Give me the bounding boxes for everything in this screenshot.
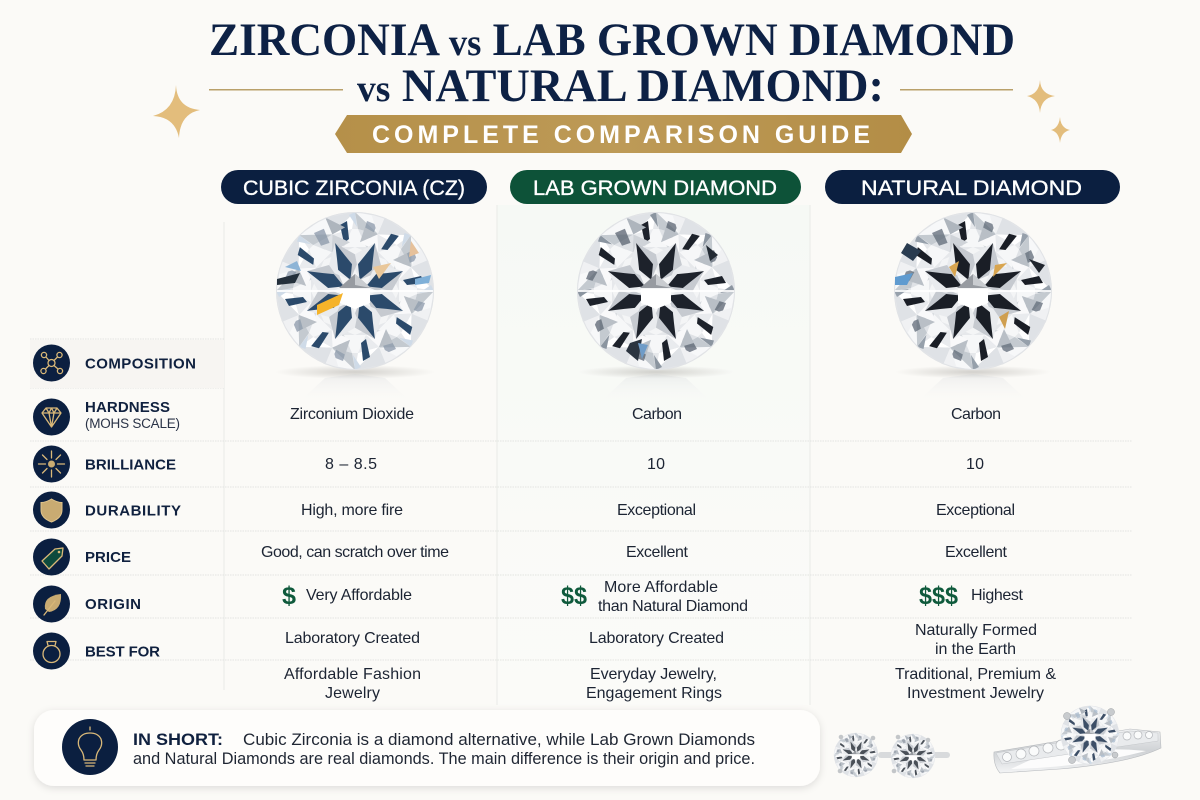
table row: origin values bbox=[285, 622, 1037, 658]
table row: durability values: Excellent bbox=[945, 544, 1008, 561]
table row: best for values: Traditional, Premium & bbox=[895, 666, 1056, 683]
table row: best for values bbox=[284, 666, 1056, 702]
table row: hardness values: 10 bbox=[647, 456, 665, 473]
subtitle banner bbox=[335, 115, 912, 153]
table row: price values: Highest bbox=[971, 587, 1024, 604]
table row: origin values: in the Earth bbox=[935, 641, 1016, 658]
grid lines bbox=[30, 205, 1132, 705]
row label: composition bbox=[30, 340, 224, 388]
table row: composition values: Carbon bbox=[632, 406, 682, 423]
table row: price values: than Natural Diamond bbox=[598, 598, 748, 615]
table row: durability values bbox=[261, 544, 1008, 561]
diamond: natural bbox=[887, 205, 1059, 404]
table row: hardness values: 10 bbox=[966, 456, 984, 473]
table row: origin values: Laboratory Created bbox=[285, 630, 420, 647]
column header: cubic zirconia bbox=[221, 170, 487, 204]
table row: price values bbox=[282, 579, 1024, 615]
table row: hardness values bbox=[325, 456, 984, 473]
column header: natural diamond bbox=[825, 170, 1120, 204]
row label: origin: ORIGIN bbox=[85, 596, 141, 613]
title: ZIRCONIA vs LAB GROWN DIAMOND bbox=[209, 14, 1015, 66]
row label: durability: DURABILITY bbox=[85, 502, 181, 520]
callout: in short bbox=[34, 710, 820, 786]
table row: durability values: Excellent bbox=[626, 544, 689, 561]
title: vs NATURAL DIAMOND: bbox=[357, 60, 884, 112]
column header: lab grown diamond: LAB GROWN DIAMOND bbox=[533, 177, 777, 200]
subtitle banner: COMPLETE COMPARISON GUIDE bbox=[372, 121, 870, 149]
table row: price values: $ bbox=[282, 582, 296, 610]
table row: brilliance values: High, more fire bbox=[301, 502, 403, 519]
row label: best for: BEST FOR bbox=[85, 644, 160, 660]
lab grown column tint bbox=[497, 205, 810, 705]
table row: brilliance values: Exceptional bbox=[617, 502, 696, 519]
column header: natural diamond: NATURAL DIAMOND bbox=[861, 177, 1082, 200]
table row: best for values: Investment Jewelry bbox=[907, 685, 1044, 702]
callout: in short: Cubic Zirconia is a diamond alternative, while Lab Grown Diamonds bbox=[243, 731, 755, 749]
table row: durability values: Good, can scratch over time bbox=[261, 544, 449, 561]
row label: hardness bbox=[33, 398, 180, 436]
table row: best for values: Affordable Fashion bbox=[284, 666, 421, 683]
callout: in short: and Natural Diamonds are real diamonds. The main difference is their origin and price. bbox=[133, 750, 755, 768]
table row: brilliance values: Exceptional bbox=[936, 502, 1015, 519]
table row: best for values: Everyday Jewelry, bbox=[590, 666, 717, 683]
callout: in short: IN SHORT: bbox=[133, 730, 223, 749]
row label: price: PRICE bbox=[85, 549, 131, 566]
table row: composition values bbox=[290, 406, 1001, 423]
row label: best for bbox=[33, 632, 160, 670]
table row: price values: Very Affordable bbox=[306, 587, 412, 604]
table row: best for values: Engagement Rings bbox=[586, 685, 722, 702]
table row: brilliance values bbox=[301, 502, 1015, 519]
table row: best for values: Jewelry bbox=[325, 685, 380, 702]
title bbox=[209, 14, 1015, 112]
row label: origin bbox=[33, 586, 141, 622]
table row: origin values: Naturally Formed bbox=[915, 622, 1037, 639]
diamond: lab grown bbox=[570, 205, 742, 404]
sparkle stars bbox=[153, 80, 1070, 143]
table row: composition values: Zirconium Dioxide bbox=[290, 406, 414, 423]
ring bbox=[994, 703, 1161, 773]
table row: origin values: Laboratory Created bbox=[589, 630, 724, 647]
table row: hardness values: 8 – 8.5 bbox=[325, 456, 377, 473]
row label: durability bbox=[33, 492, 181, 528]
row label: price bbox=[33, 538, 131, 576]
table row: composition values: Carbon bbox=[951, 406, 1001, 423]
diamond: cubic zirconia bbox=[269, 205, 441, 404]
table row: price values: $$ bbox=[561, 582, 587, 610]
row label: composition: COMPOSITION bbox=[85, 356, 196, 372]
row label: hardness: HARDNESS bbox=[85, 399, 170, 416]
column header: cubic zirconia: CUBIC ZIRCONIA (CZ) bbox=[243, 177, 465, 200]
column header: lab grown diamond bbox=[510, 170, 801, 204]
title rule lines bbox=[209, 89, 1013, 90]
row label: brilliance: BRILLIANCE bbox=[85, 456, 176, 474]
row label: brilliance bbox=[33, 446, 176, 482]
earrings bbox=[832, 731, 950, 780]
row label: hardness: (MOHS SCALE) bbox=[85, 416, 180, 431]
table row: price values: More Affordable bbox=[604, 579, 718, 596]
table row: price values: $$$ bbox=[919, 582, 958, 610]
